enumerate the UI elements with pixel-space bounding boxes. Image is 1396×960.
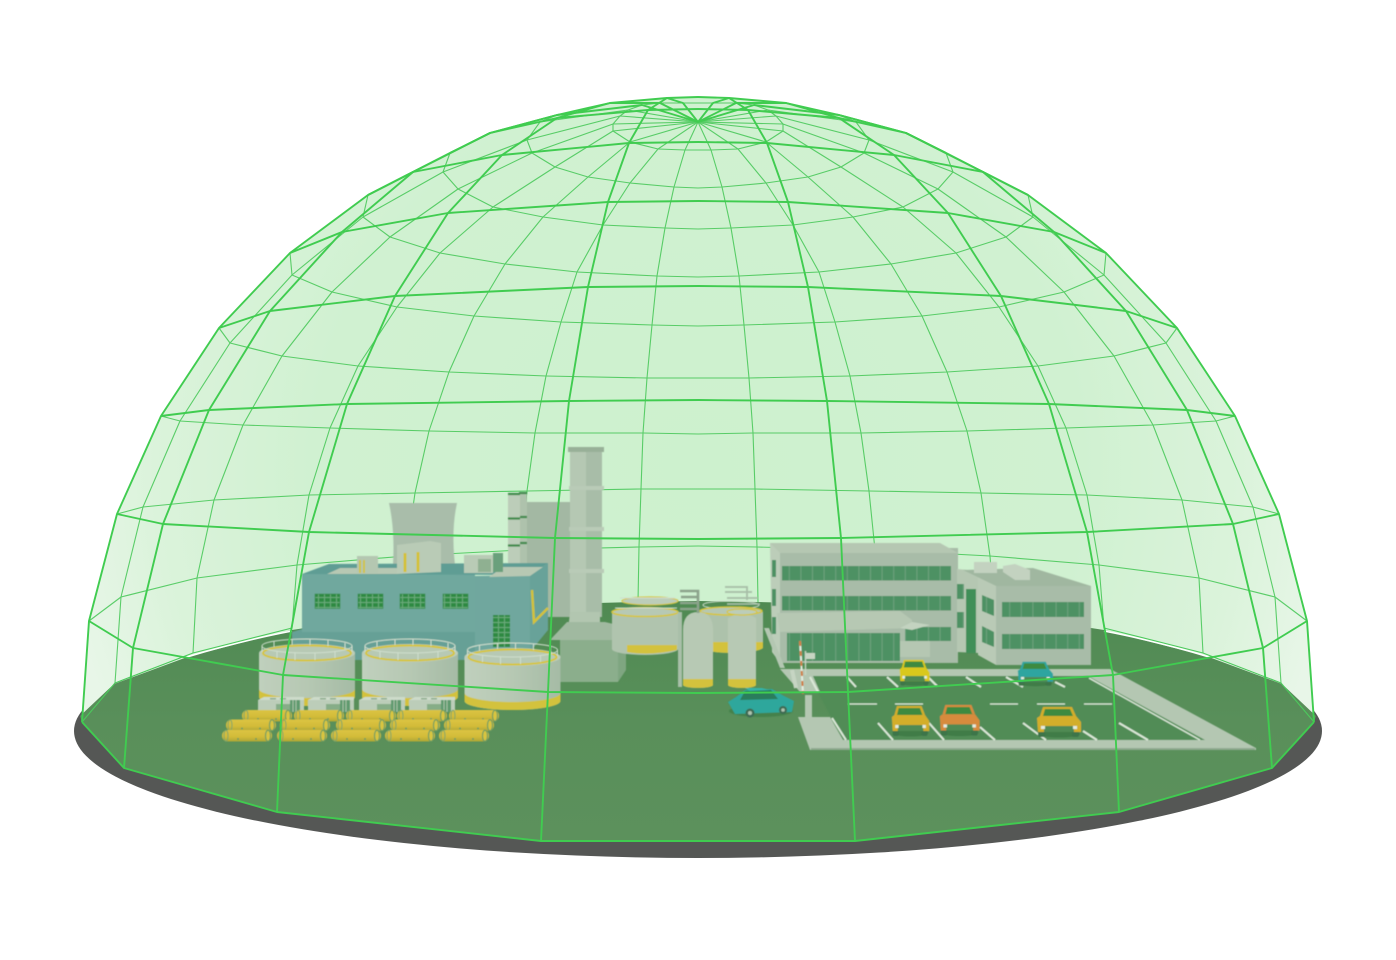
roof units — [357, 541, 503, 574]
annex roof units — [974, 562, 1030, 580]
factory complex — [292, 447, 626, 682]
office main windows — [772, 560, 951, 641]
boom arm stripes — [800, 641, 803, 694]
far-side base ring on the ground — [82, 628, 1314, 722]
parked pickups — [892, 660, 1081, 738]
cooling tower — [389, 503, 457, 565]
office ground floor glazing — [787, 633, 900, 661]
office building main — [770, 543, 958, 663]
annex rear wall — [957, 569, 978, 653]
front round tank — [612, 597, 678, 655]
light pole — [804, 651, 806, 675]
pickup yellow front left — [892, 706, 929, 736]
factory lower plinth — [292, 629, 475, 660]
pickup blue back — [1018, 662, 1053, 686]
three large storage tanks — [259, 639, 560, 710]
silo stairs — [680, 591, 698, 613]
factory door — [493, 615, 510, 647]
annex windows — [957, 584, 1084, 649]
back round tank — [700, 601, 763, 653]
curb shadow edge — [811, 748, 1255, 750]
factory main wall — [302, 574, 475, 632]
yellow gas cylinders — [222, 710, 499, 742]
dark base disc — [74, 604, 1322, 858]
rooftop style AC units — [258, 697, 455, 712]
office canopy — [777, 611, 912, 632]
parking curb — [780, 669, 1256, 750]
office main roof edge — [770, 543, 958, 553]
pole lamp — [806, 653, 815, 659]
silo left — [678, 612, 713, 688]
dome far-side wireframe — [89, 97, 1307, 683]
dome near-side wireframe — [82, 97, 1314, 841]
silo right — [727, 609, 757, 688]
annex side wall — [978, 572, 996, 665]
pickup yellow front right — [1037, 707, 1081, 738]
parking lot — [764, 628, 1256, 750]
ground edge highlight — [187, 631, 1209, 657]
ground surface — [80, 601, 1316, 841]
chimney block behind — [527, 502, 570, 617]
factory roof — [302, 563, 548, 577]
annex front wall — [996, 586, 1091, 665]
annex entrance glazing — [966, 589, 976, 653]
office main front wall — [780, 548, 958, 663]
factory windows — [315, 594, 468, 608]
annex roof — [963, 568, 1091, 586]
middle process tanks and silos — [612, 587, 763, 688]
stack base box — [550, 622, 626, 682]
silo railings — [725, 587, 760, 604]
parking curb side strip — [764, 628, 785, 668]
boom arm — [800, 641, 803, 694]
office building annex — [957, 562, 1091, 665]
factory right block — [475, 563, 548, 652]
gate box — [805, 695, 812, 721]
dome glass surface — [82, 97, 1314, 722]
office main left side — [770, 543, 780, 663]
boom barrier and sign post — [792, 641, 815, 721]
tall exhaust stack — [567, 447, 604, 640]
parking bay markings — [810, 677, 1200, 740]
office entrance canopy — [900, 622, 930, 630]
industrial site — [222, 447, 1256, 750]
teal sedan — [728, 688, 794, 718]
striped chimney — [508, 492, 527, 574]
pickup yellow back — [900, 660, 930, 686]
pickup orange front — [940, 705, 980, 736]
yellow wall pipe — [532, 590, 548, 622]
bollard — [792, 670, 796, 688]
parking surface — [813, 676, 1205, 740]
